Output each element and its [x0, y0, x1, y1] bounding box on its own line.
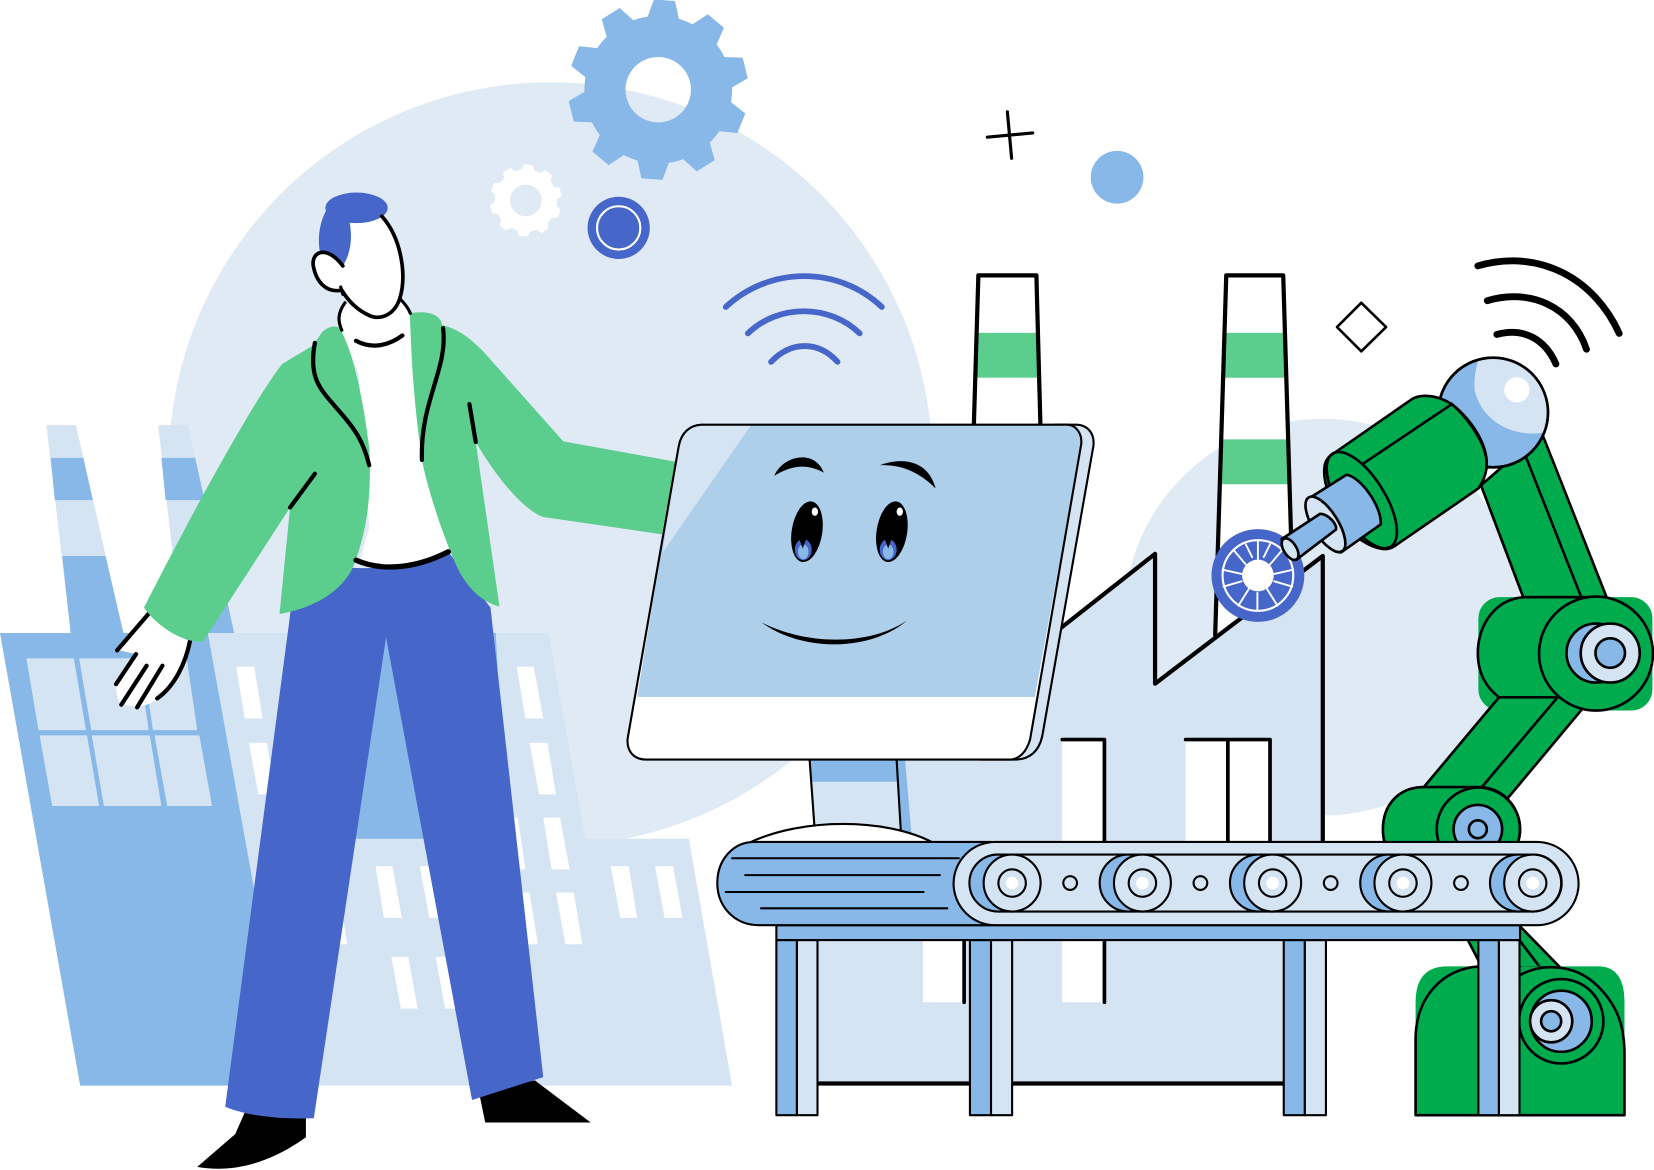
dark building [0, 633, 295, 1086]
screen glare [662, 425, 751, 553]
back plate [981, 425, 1094, 760]
rollers [969, 855, 1561, 912]
factory windows [923, 739, 1270, 1002]
back chimneys [46, 425, 234, 633]
hand lines [116, 613, 190, 707]
eye left [787, 499, 827, 564]
light blue dot [1091, 151, 1143, 204]
spinning blue disk [1211, 529, 1304, 622]
hand [116, 613, 190, 707]
face outline [313, 216, 403, 317]
trousers [225, 552, 543, 1118]
monitor base dome [749, 824, 934, 843]
table legs [776, 940, 1520, 1115]
screen [628, 425, 1081, 760]
belt [954, 842, 1579, 925]
tool tube [1278, 475, 1381, 563]
conveyor [717, 824, 1579, 1115]
shoulder joint [1478, 597, 1653, 711]
housing lines [726, 858, 959, 908]
screen outline [628, 425, 1081, 760]
dark centre block [316, 633, 506, 839]
shoes [197, 1080, 591, 1169]
computer monitor [628, 425, 1094, 833]
face brows [774, 457, 936, 488]
diamond sparkle [1337, 303, 1386, 351]
chimney left [974, 275, 1041, 433]
shirt and neck [339, 299, 454, 564]
light building windows [236, 667, 682, 1009]
conveyor housing [717, 842, 992, 925]
smile [762, 620, 907, 644]
table top bar [776, 925, 1520, 940]
jacket lines [290, 328, 476, 567]
hair [319, 209, 351, 266]
plus sparkle [987, 112, 1033, 158]
jacket [144, 312, 675, 642]
small white gear [489, 164, 562, 237]
background factory [0, 425, 732, 1086]
front chimneys [974, 275, 1293, 635]
upper arm [1481, 433, 1607, 597]
head [313, 193, 410, 330]
lower strut [1467, 926, 1560, 967]
elbow joint [1383, 787, 1520, 871]
blue wifi signal [726, 276, 882, 362]
eye right [872, 499, 912, 564]
shoulder backing [1478, 597, 1652, 711]
hat [325, 193, 388, 223]
roof outline [1061, 554, 1323, 841]
dark building window panes [26, 658, 212, 806]
top left gear, large [567, 0, 749, 180]
black wifi signal [1478, 261, 1619, 364]
background blobs [169, 82, 1521, 846]
stand [810, 760, 911, 833]
blue dot with white ring [588, 197, 650, 259]
ball joint [1438, 358, 1548, 467]
man [116, 193, 675, 1169]
neck lines [339, 287, 410, 330]
base [1416, 966, 1624, 1115]
robot arm [1278, 358, 1653, 1115]
front factory building [819, 554, 1323, 1083]
light building [208, 633, 732, 1086]
lower arm [1423, 697, 1582, 799]
chimney right [1215, 275, 1293, 635]
ground line [819, 1081, 1285, 1085]
forearm cylinder [1313, 396, 1487, 559]
